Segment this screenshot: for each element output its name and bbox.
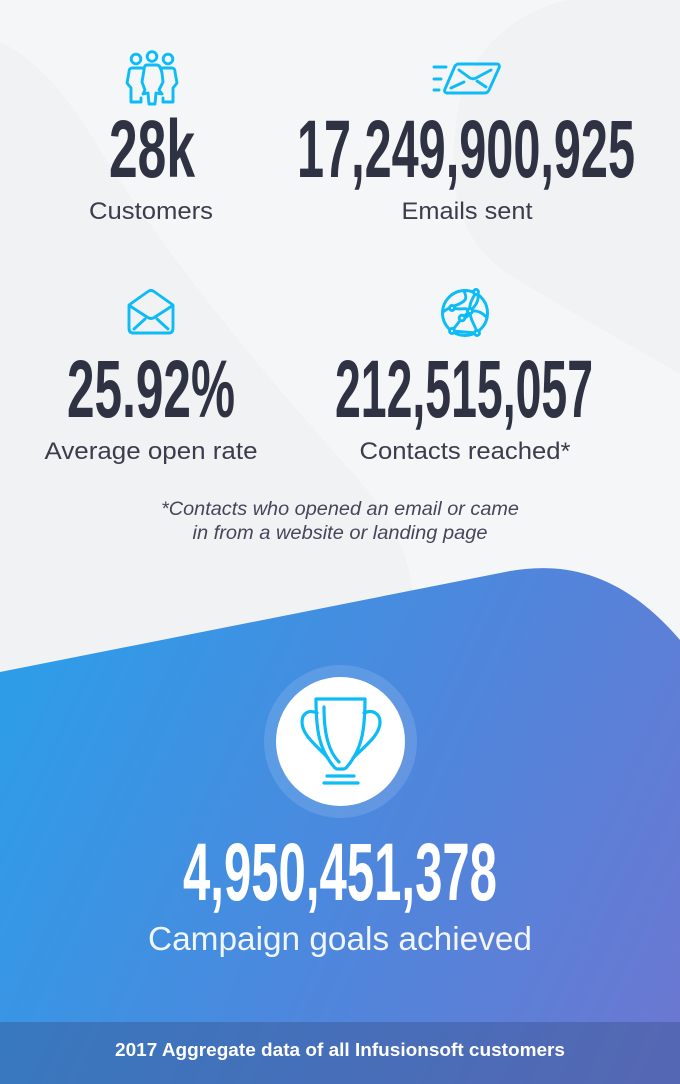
label: campaign goals: Campaign goals achieved [148,920,532,957]
stat: customers [89,52,213,225]
blue panel [0,568,680,1084]
label: emails sent: Emails sent [402,198,533,225]
number: open rate: 25.92% [67,344,235,435]
icon: trophy [302,699,380,783]
stat: emails sent [297,64,635,225]
footnote: in from a website or landing page [192,523,488,544]
footer text: 2017 Aggregate data of all Infusionsoft customers [115,1040,565,1060]
label: contacts reached: Contacts reached* [360,438,570,465]
footnote [161,499,519,544]
icon: sending envelope [434,64,499,93]
label: customers: Customers [89,198,213,225]
stat: contacts reached [335,290,593,465]
number: 28k: 28k [109,104,195,195]
icon: open envelope [129,290,173,333]
footnote: *Contacts who opened an email or came [161,499,519,520]
icon: network globe [442,290,488,336]
icon: people [127,52,177,104]
trophy badge [264,665,417,818]
background shape: right [453,0,680,374]
stat: open rate [44,290,258,465]
label: open rate: Average open rate [44,438,258,465]
footer bar [0,1022,680,1084]
background shape: left [0,42,415,690]
